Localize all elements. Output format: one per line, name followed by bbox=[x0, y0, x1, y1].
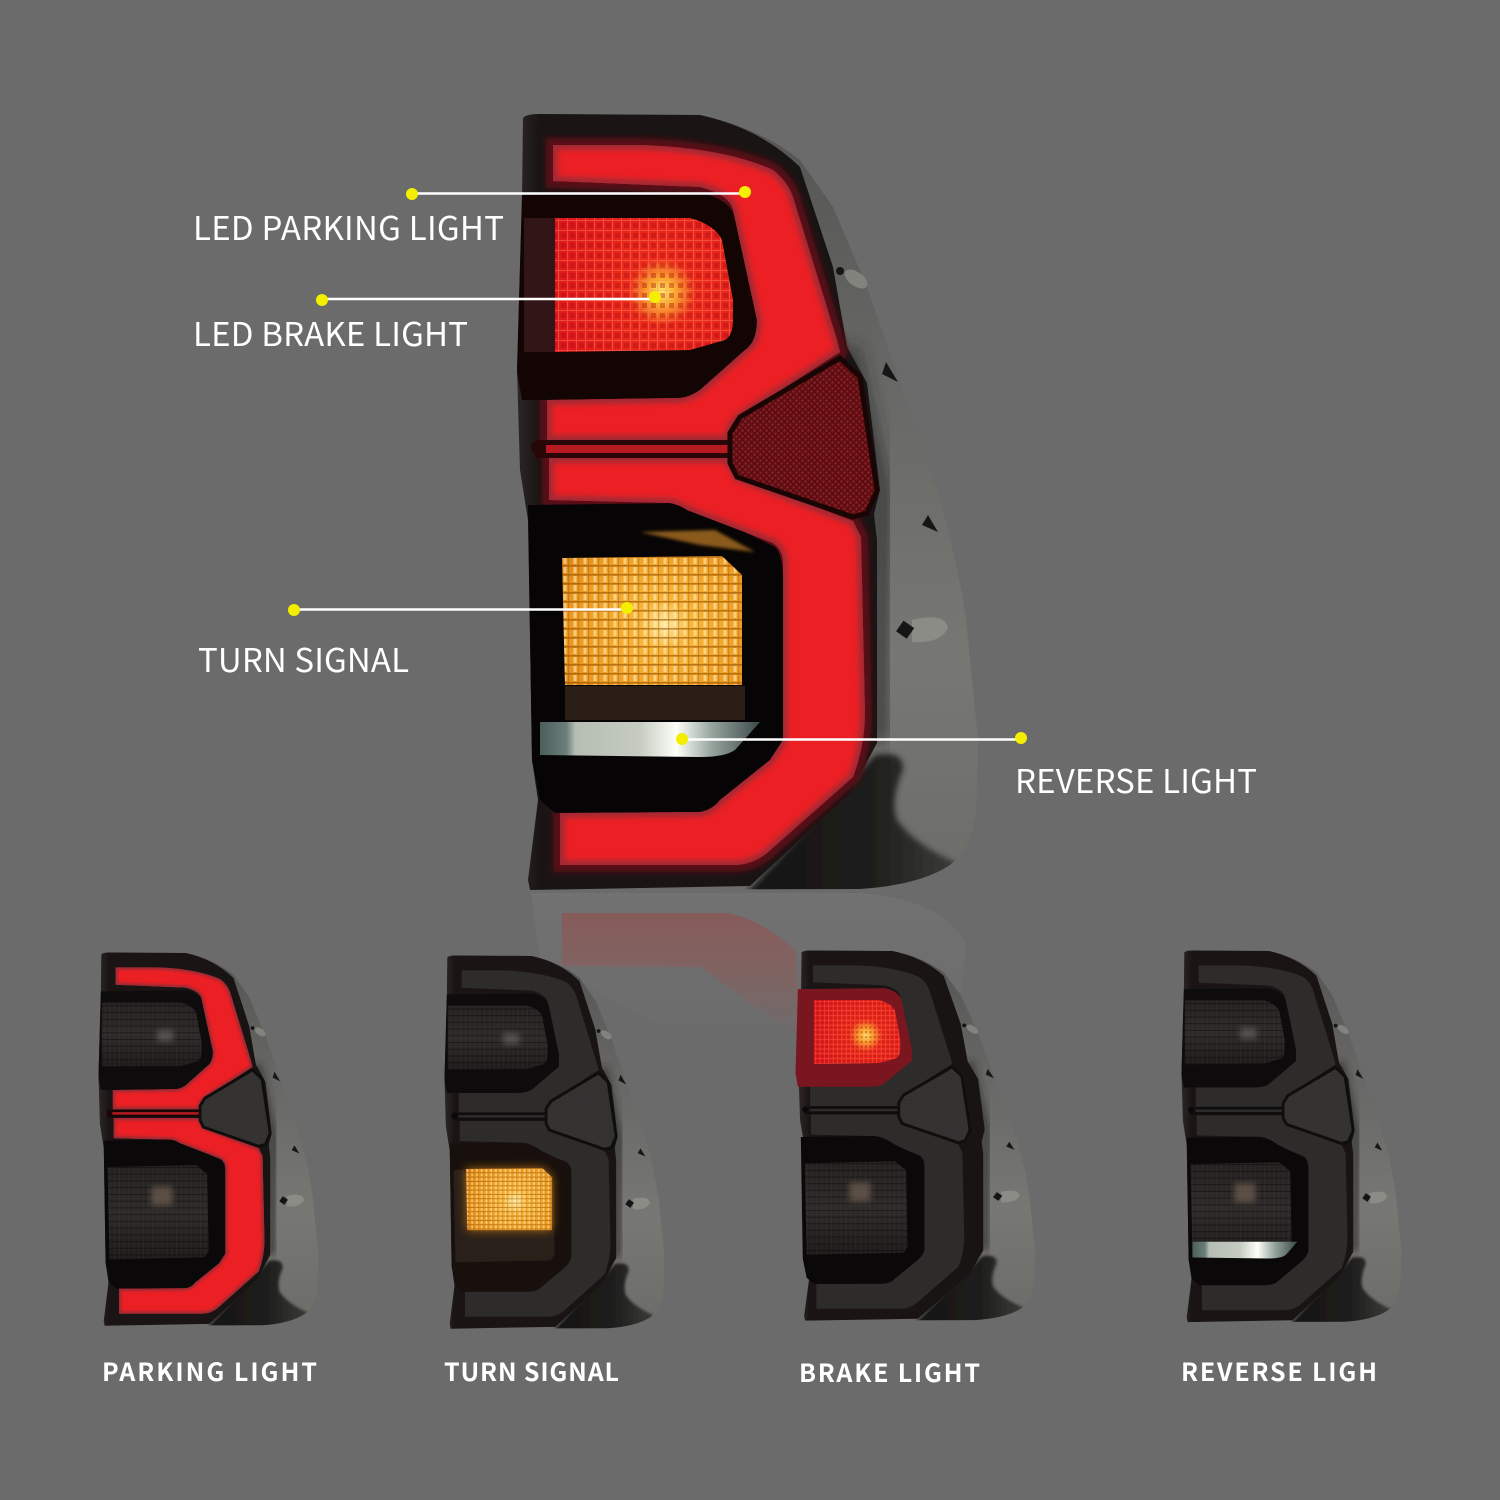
upper recess bbox=[98, 990, 213, 1090]
amber reflection above turn lens bbox=[640, 530, 755, 552]
dim panel under turn lens bbox=[565, 686, 745, 720]
red tube lit bbox=[113, 967, 264, 1314]
lower recess bbox=[1187, 1137, 1308, 1285]
shell bbox=[799, 950, 1035, 1325]
lower recess bbox=[801, 1136, 924, 1284]
lower smoked lens bbox=[805, 1161, 908, 1255]
small lamp: turn signal bbox=[444, 955, 664, 1334]
lamp body shell bbox=[517, 114, 978, 900]
label: parking light: PARKING LIGHT bbox=[102, 1353, 317, 1389]
red light guide tube bbox=[547, 145, 865, 865]
upper lamp recess bbox=[517, 193, 757, 400]
lit brake lens bbox=[814, 1000, 900, 1064]
upper recess bbox=[444, 993, 559, 1093]
unlit tube bbox=[810, 965, 964, 1309]
lit reverse lens bbox=[1192, 1242, 1297, 1258]
unlit tube bbox=[459, 970, 610, 1317]
upper smoked lens bbox=[102, 1003, 202, 1067]
label: turn signal: TURN SIGNAL bbox=[444, 1353, 619, 1389]
shell bbox=[98, 952, 318, 1331]
reflector bbox=[899, 1067, 970, 1143]
small lamp: parking light bbox=[98, 952, 318, 1331]
reflector bbox=[200, 1070, 270, 1146]
reflector bbox=[546, 1073, 616, 1149]
lit turn lens bbox=[466, 1168, 552, 1230]
groove bbox=[451, 1113, 546, 1120]
callout: reverse light bbox=[676, 732, 1257, 803]
lit turn signal lens bbox=[562, 556, 742, 685]
lower recess bbox=[450, 1143, 571, 1292]
glow bbox=[466, 1168, 552, 1230]
upper recess bbox=[1181, 988, 1296, 1087]
callout: turn signal bbox=[198, 602, 633, 682]
smoked left band of upper lens bbox=[524, 218, 556, 352]
groove bbox=[802, 1106, 899, 1114]
main tail lamp bbox=[517, 114, 978, 900]
upper smoked lens bbox=[448, 1006, 548, 1070]
lamp interior bbox=[795, 965, 970, 1309]
lit reverse lens bbox=[540, 722, 760, 757]
red tube halo border bbox=[547, 145, 865, 865]
small lamp: brake light bbox=[795, 950, 1035, 1325]
callout: turn signal: TURN SIGNAL bbox=[198, 634, 409, 682]
groove bbox=[1188, 1107, 1283, 1115]
callout: LED brake light bbox=[193, 291, 661, 356]
reflector bbox=[1283, 1067, 1353, 1144]
lower lens dim surround bbox=[454, 1168, 555, 1262]
centre groove bbox=[531, 440, 730, 458]
floor reflection of main lamp bbox=[531, 893, 966, 1060]
callout: reverse light: REVERSE LIGHT bbox=[1015, 755, 1257, 803]
groove bbox=[107, 1110, 200, 1117]
lower recess bbox=[104, 1140, 225, 1289]
unlit tube bbox=[1196, 965, 1347, 1310]
side reflector bbox=[730, 358, 877, 517]
label: brake light: BRAKE LIGHT bbox=[799, 1354, 980, 1390]
lower lamp recess bbox=[528, 503, 783, 813]
upper smoked lens bbox=[1185, 1000, 1285, 1064]
upper recess red bbox=[795, 988, 912, 1087]
shell bbox=[444, 955, 664, 1334]
shell bbox=[1181, 950, 1401, 1327]
callout: LED parking light: LED PARKING LIGHT bbox=[193, 202, 504, 250]
label: reverse light (cropped as in original): REVERSE LIGH bbox=[1181, 1353, 1377, 1389]
callout: LED parking light bbox=[193, 186, 751, 250]
callout: LED brake light: LED BRAKE LIGHT bbox=[193, 308, 468, 356]
lower smoked lens bbox=[108, 1165, 209, 1259]
lower smoked lens bbox=[1191, 1162, 1292, 1256]
lit brake lens bbox=[555, 218, 733, 352]
small lamp: reverse light bbox=[1181, 950, 1401, 1327]
